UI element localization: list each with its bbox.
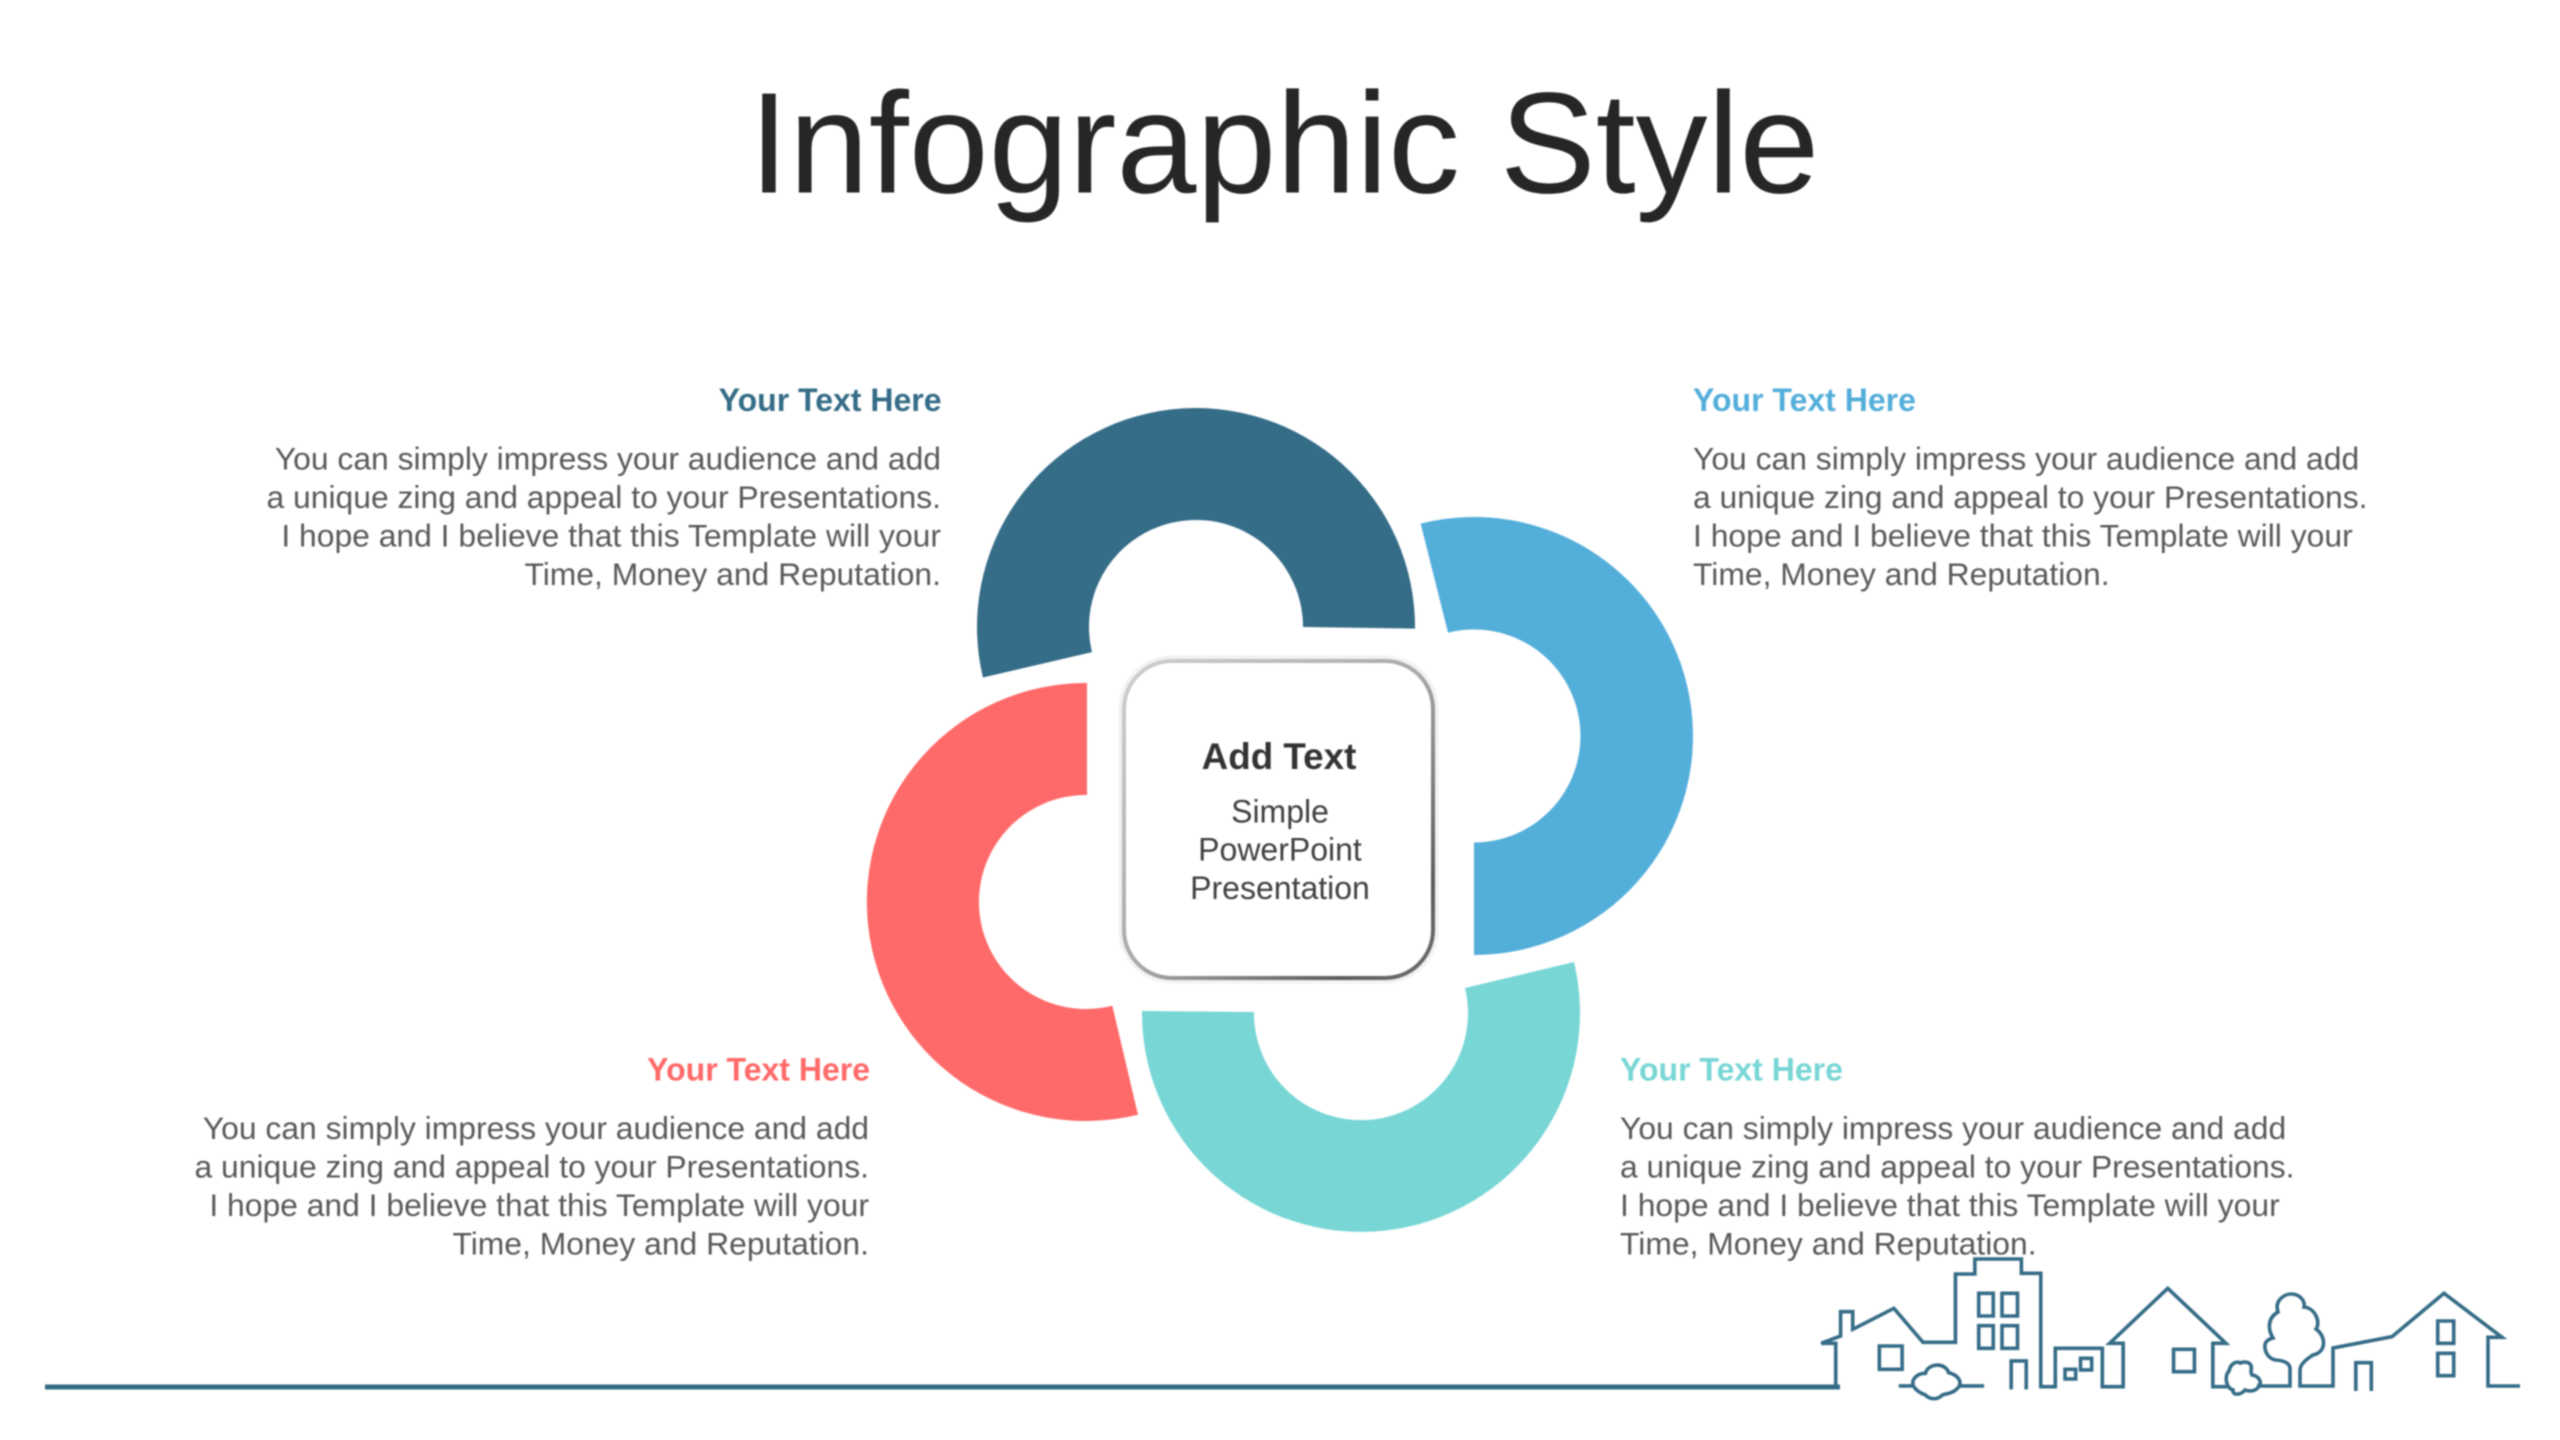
body text: bottom-left: a unique zing and appeal to your Presentations. <box>194 1148 869 1184</box>
petal: light blue <box>1421 517 1693 955</box>
card text: Simple <box>1231 794 1329 830</box>
icon: town skyline <box>1821 1259 2520 1399</box>
tree and right house <box>2260 1293 2520 1386</box>
body text: top-left: I hope and I believe that this Template will your <box>281 518 941 554</box>
bush: left <box>1899 1365 1984 1399</box>
title: Infographic Style <box>749 64 1819 224</box>
card heading: Add Text <box>1202 736 1356 777</box>
panel: top-right text <box>1693 382 2368 592</box>
body text: bottom-right: a unique zing and appeal to your Presentations. <box>1620 1148 2295 1184</box>
card text: PowerPoint <box>1198 832 1362 868</box>
card outline <box>1124 661 1433 978</box>
buildings <box>1821 1259 2454 1399</box>
card text: Presentation <box>1190 870 1370 906</box>
body text: bottom-left: I hope and I believe that this Template will your <box>209 1187 869 1223</box>
petal: teal <box>1142 962 1580 1232</box>
flower diagram <box>867 408 1693 1232</box>
body text: bottom-right: I hope and I believe that this Template will your <box>1620 1187 2280 1223</box>
skyline: buildings left <box>1821 1259 2228 1387</box>
center card <box>1124 661 1433 978</box>
bush: right <box>2226 1362 2260 1394</box>
body text: top-right: a unique zing and appeal to your Presentations. <box>1693 479 2368 515</box>
heading: bottom-right: Your Text Here <box>1620 1052 1843 1088</box>
body text: top-left <box>266 440 941 592</box>
card glow <box>1124 661 1433 978</box>
panel: bottom-left text <box>194 1052 870 1262</box>
windows and doors <box>1879 1293 2454 1391</box>
body text: bottom-right <box>1620 1110 2295 1262</box>
body text: top-left: You can simply impress your audience and add <box>275 440 941 476</box>
heading: bottom-left: Your Text Here <box>647 1052 870 1088</box>
petal: coral <box>867 683 1138 1121</box>
ground line <box>45 1384 1840 1390</box>
heading: top-right: Your Text Here <box>1693 382 1916 418</box>
body text: top-right: Time, Money and Reputation. <box>1693 556 2110 592</box>
petal: dark blue <box>977 408 1415 678</box>
body text: top-left: Time, Money and Reputation. <box>524 556 941 592</box>
body text: top-right: You can simply impress your audience and add <box>1693 440 2359 476</box>
heading: top-left: Your Text Here <box>719 382 942 418</box>
body text: top-right: I hope and I believe that this Template will your <box>1693 518 2353 554</box>
body text: bottom-left: Time, Money and Reputation. <box>452 1226 869 1262</box>
body text: bottom-right: You can simply impress your audience and add <box>1620 1110 2286 1146</box>
panel: bottom-right text <box>1620 1052 2295 1262</box>
body text: bottom-left: You can simply impress your audience and add <box>203 1110 869 1146</box>
body text: top-right <box>1693 440 2368 592</box>
panel: top-left text <box>266 382 942 592</box>
card text <box>1190 794 1370 906</box>
body text: top-left: a unique zing and appeal to your Presentations. <box>266 479 941 515</box>
body text: bottom-left <box>194 1110 869 1262</box>
body text: bottom-right: Time, Money and Reputation. <box>1620 1226 2037 1262</box>
